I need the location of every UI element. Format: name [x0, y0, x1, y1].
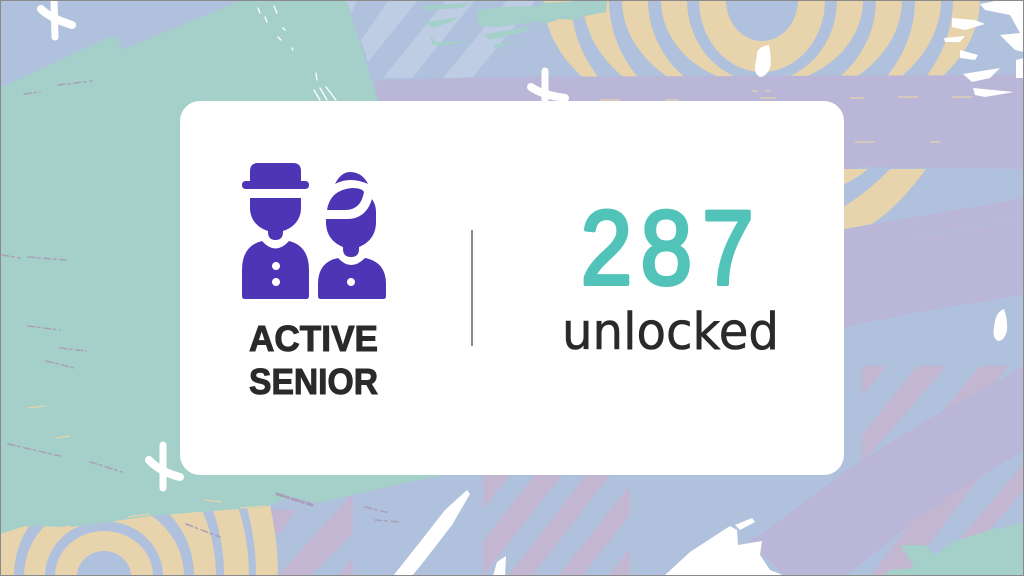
- background: lilac horizontal band: [375, 75, 1024, 170]
- background: lilac diagonal brush: [748, 366, 1024, 576]
- woman hair bun: [335, 172, 368, 184]
- background: gray scratches on green: [2, 81, 400, 537]
- woman hair band: [327, 188, 364, 210]
- decorative white cross bottom left: [149, 445, 180, 488]
- background: white scratches on green: [258, 6, 336, 100]
- label: active senior: [249, 318, 378, 402]
- background: concentric rings bottom left: [1, 505, 278, 575]
- panel: white card: [180, 101, 844, 475]
- background: blue streaks in band: [846, 217, 1024, 299]
- background: beige flecks on green: [10, 406, 266, 532]
- man body with buttons: [242, 241, 309, 299]
- background: pink stripes bottom centre: [483, 475, 630, 576]
- background: lilac slanted band right: [840, 198, 1024, 328]
- label: unlocked: unlocked: [562, 303, 779, 362]
- background: green brush bottom right: [883, 523, 1024, 576]
- background: concentric rings top: [544, 1, 980, 77]
- background: pink stripes right: [862, 366, 1009, 463]
- man hat: [242, 163, 309, 189]
- background: top diagonal stripes: [346, 0, 536, 78]
- background: pink stripes bottom right: [871, 463, 1024, 576]
- background: beige arcs under band: [840, 169, 926, 230]
- woman body with button: [318, 258, 386, 299]
- woman head: [326, 199, 376, 257]
- background: large green brush shape: [0, 0, 445, 534]
- number: 287: 287: [581, 188, 754, 306]
- background: pink stripes bottom left: [268, 493, 353, 576]
- background: green brush streaks top: [421, 0, 607, 50]
- background: beige flecks in band: [600, 91, 972, 142]
- label: active senior: SENIOR: [249, 361, 378, 402]
- divider: [471, 230, 473, 346]
- decorative white paint marks: [393, 0, 1024, 576]
- decorative white cross top centre: [531, 71, 565, 101]
- icon: senior couple: [242, 163, 386, 299]
- man head: [250, 198, 301, 240]
- label: active senior: ACTIVE: [249, 318, 378, 359]
- decorative white cross top left: [41, 0, 72, 37]
